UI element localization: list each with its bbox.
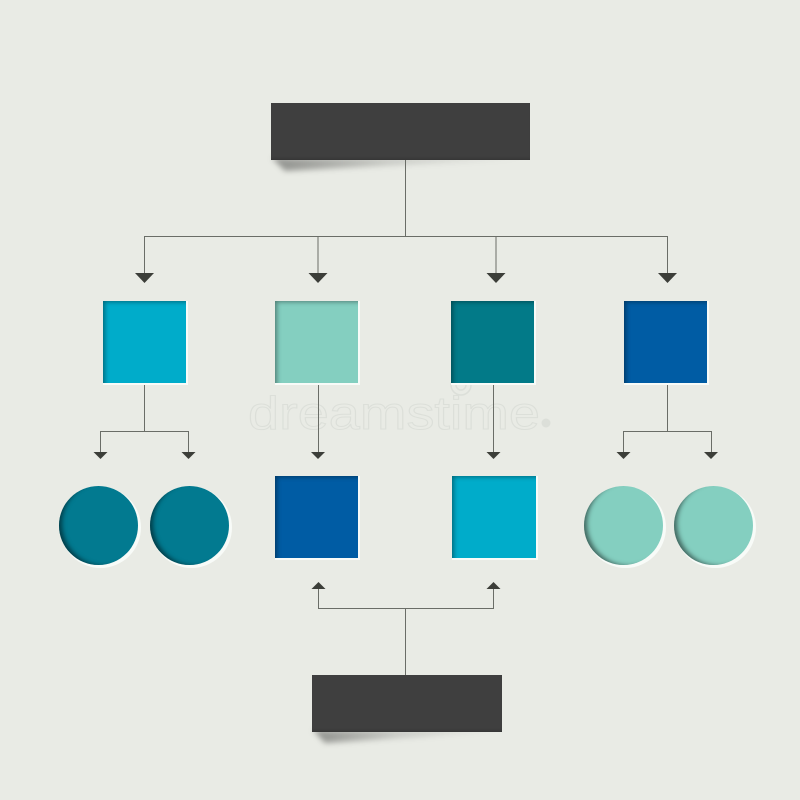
square: blue [624, 301, 707, 383]
square: lower blue [275, 476, 358, 558]
watermark: dreamstime [248, 387, 540, 439]
square: teal [451, 301, 534, 383]
circle: mint right [674, 486, 753, 565]
top box [271, 103, 530, 160]
circle: mint left [584, 486, 663, 565]
circle: teal right [150, 486, 229, 565]
bottom box [312, 675, 502, 732]
circle: teal left [59, 486, 138, 565]
square: cyan [103, 301, 186, 383]
square: mint [275, 301, 358, 383]
square: lower cyan [452, 476, 536, 558]
